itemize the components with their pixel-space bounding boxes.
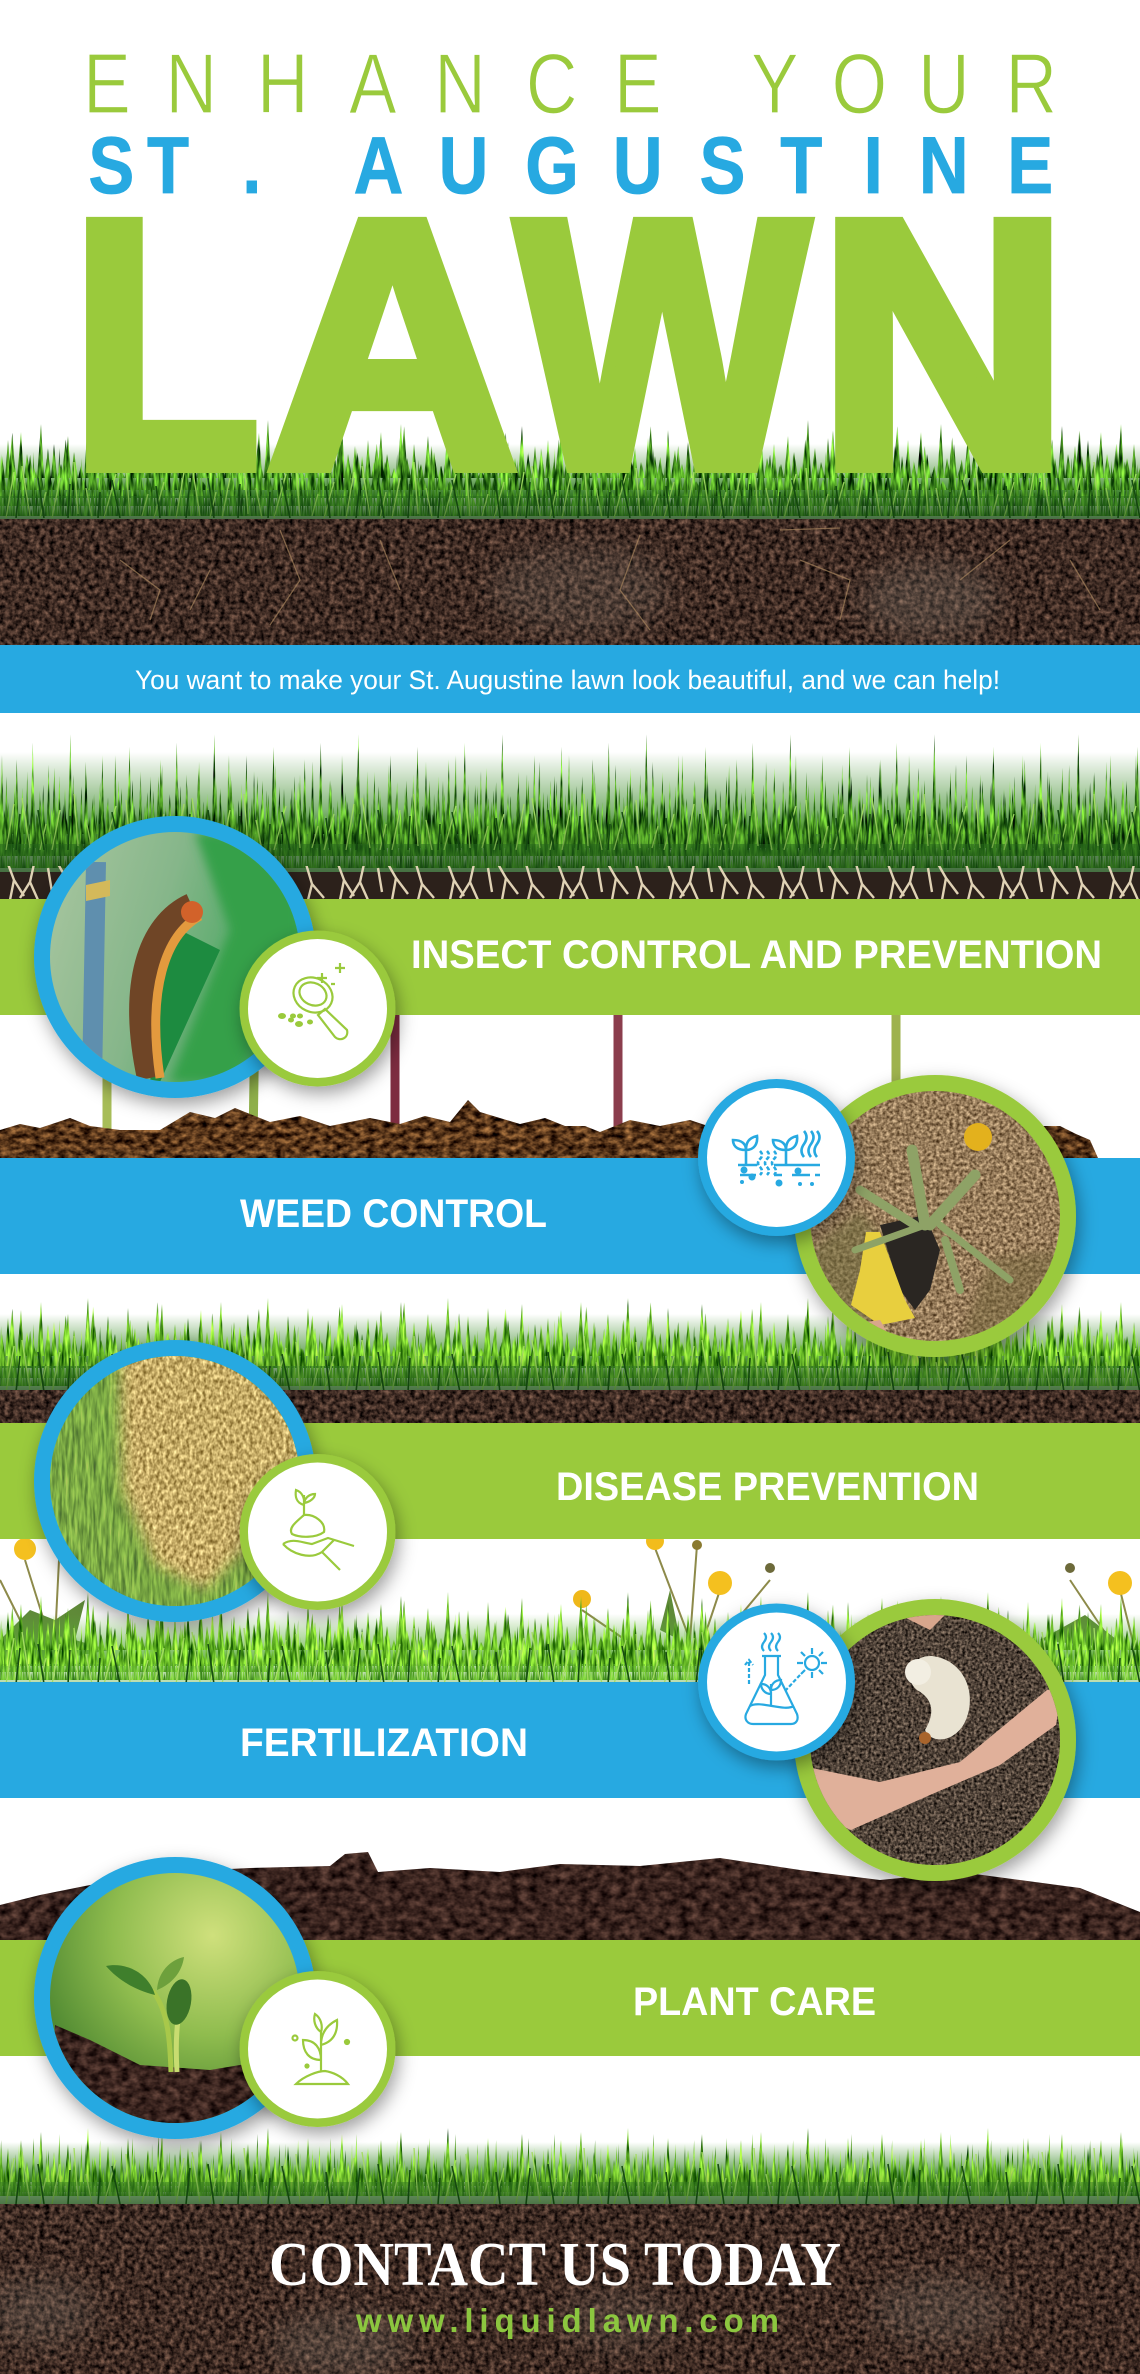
soil xyxy=(0,2204,1140,2374)
grass xyxy=(0,2126,1140,2206)
soil xyxy=(0,1390,1140,1424)
banner: intro xyxy=(0,645,1140,713)
panel: hero lawn strip xyxy=(0,418,1140,645)
icon badge: plants and soil xyxy=(698,1079,855,1236)
icon: plants xyxy=(733,1131,820,1186)
panel: soil mound xyxy=(0,1852,1140,1942)
soil cross-section xyxy=(0,519,1140,645)
call to action: contact us today: CONTACT US TODAY xyxy=(269,2231,841,2299)
title: Lawn: L xyxy=(72,149,260,542)
photo circle: weed in gloved hand xyxy=(794,1075,1076,1357)
title: Lawn xyxy=(72,147,1068,542)
grass xyxy=(0,730,1140,876)
band title: DISEASE PREVENTION xyxy=(556,1465,979,1509)
website url: www.liquidlawn.com xyxy=(355,2302,779,2339)
grass xyxy=(0,1296,1140,1392)
band title: WEED CONTROL xyxy=(240,1192,547,1236)
photo circle: caterpillar xyxy=(34,816,316,1098)
title: Enhance Your: ENHANCE YOUR xyxy=(83,36,1057,131)
grass xyxy=(0,1590,1140,1684)
band: fertilization xyxy=(0,1682,1140,1798)
icon badge: flask xyxy=(698,1604,855,1760)
band title: FERTILIZATION xyxy=(240,1721,528,1765)
title: Lawn: W xyxy=(517,149,811,542)
icon: magnifying glass xyxy=(278,963,347,1039)
panel: bottom lawn strip xyxy=(0,2126,1140,2374)
band title: INSECT CONTROL AND PREVENTION xyxy=(411,933,1102,977)
panel: tall grass with roots xyxy=(0,730,1140,899)
icon: hand with sprout xyxy=(283,1490,354,1570)
soil and roots xyxy=(0,866,1140,899)
intro text: You want to make your St. Augustine lawn look beautiful, and we can help! xyxy=(135,665,1000,695)
photo circle: seedling xyxy=(34,1857,316,2139)
band title: PLANT CARE xyxy=(633,1980,876,2024)
photo circle: dry grass patch xyxy=(34,1340,316,1622)
icon badge: hand with sprout xyxy=(240,1454,396,1610)
title: St. Augustine: ST. AUGUSTINE xyxy=(88,120,1053,210)
band: weed control xyxy=(0,1158,1140,1274)
soil ridge xyxy=(0,1100,1098,1158)
panel: weed stems and soil xyxy=(0,1010,1098,1158)
icon: potted sprout xyxy=(292,2014,349,2084)
panel: mid grass with soil xyxy=(0,1296,1140,1424)
band: disease prevention xyxy=(0,1423,1140,1539)
title: Lawn: N xyxy=(819,148,1068,541)
grass strip xyxy=(0,418,1140,521)
panel: dandelions and grass xyxy=(0,1532,1140,1684)
icon badge: plant in soil xyxy=(240,1971,396,2127)
stems xyxy=(107,1010,896,1150)
dandelions xyxy=(0,1532,1135,1670)
title: Lawn: A xyxy=(268,147,517,541)
icon badge: magnifier xyxy=(240,930,396,1086)
icon: flask with sun xyxy=(745,1633,827,1724)
band: insect control xyxy=(0,899,1140,1015)
band: plant care xyxy=(0,1940,1140,2056)
photo circle: grub on hand xyxy=(794,1599,1076,1881)
